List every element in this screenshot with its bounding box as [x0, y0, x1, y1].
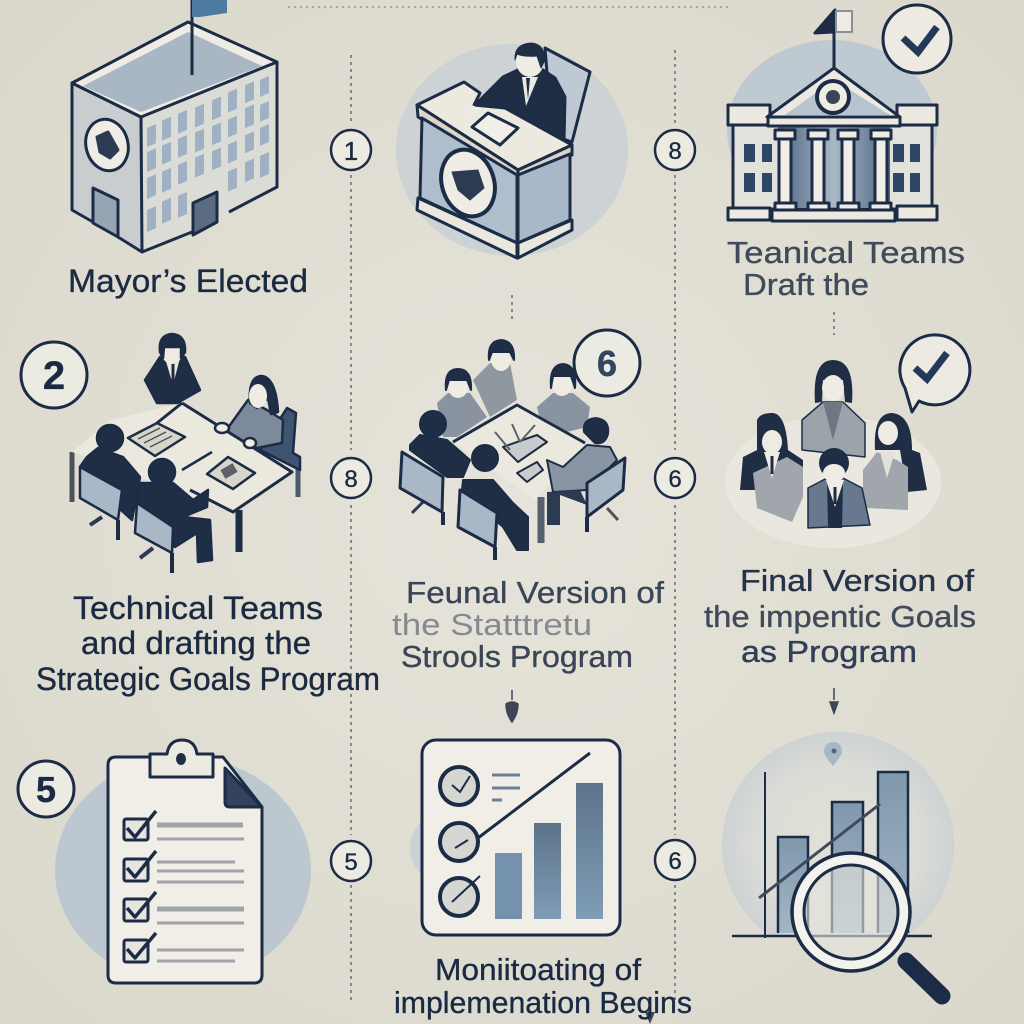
checklist lines: [157, 825, 244, 961]
chart bars: [495, 783, 603, 919]
panel: checklist: [18, 740, 311, 983]
arrow: connector at page bottom: [645, 1012, 655, 1024]
step marker 8 top: [655, 130, 695, 170]
label: [392, 575, 664, 674]
label: Strategic Goals Program: [36, 661, 380, 697]
panel: monitoring chart: [394, 740, 692, 1020]
icon: magnifying glass: [792, 853, 942, 996]
panel: government palace with check: [727, 5, 965, 302]
label: as Program: [741, 634, 917, 669]
backdrop ellipse: [410, 790, 620, 906]
panel: mayor at podium: [396, 43, 628, 258]
label: implemenation Begins: [394, 985, 692, 1020]
step marker 8 middle: 8: [344, 466, 358, 493]
backdrop ellipse: [725, 416, 941, 548]
step badge 5: 5: [36, 769, 56, 810]
panel: approving group: [704, 335, 976, 669]
label: the impentic Goals: [704, 599, 976, 634]
step badge 5: [18, 761, 74, 817]
backdrop circle: [55, 757, 311, 983]
backdrop circle: [727, 40, 937, 220]
label: [394, 952, 692, 1020]
icon: meeting table: [72, 334, 300, 573]
label: [704, 563, 976, 669]
label: Mayor’s Elected: [68, 263, 308, 299]
arrow: connector below step 6: [830, 688, 838, 713]
label: Technical Teams: [73, 590, 323, 626]
step badge 2: 2: [43, 354, 65, 398]
step marker 6 middle: [655, 458, 695, 498]
label: Draft the: [743, 267, 869, 302]
step marker 1: 1: [344, 136, 358, 166]
label: Feunal Version of: [406, 575, 664, 610]
label: Teanical Teams: [727, 235, 965, 270]
label: and drafting the: [81, 625, 311, 661]
step marker 6 bottom: [655, 840, 695, 880]
step marker 8 middle: [331, 458, 371, 498]
icon: city hall building: [72, 0, 277, 252]
chart bars: [778, 772, 908, 933]
icon: meeting table group: [400, 340, 625, 560]
panel: technical teams meeting: [21, 334, 380, 697]
icon: people group: [740, 360, 927, 528]
step marker 6 middle: 6: [668, 466, 682, 493]
backdrop circle: [722, 732, 954, 935]
label: [36, 590, 380, 697]
panel: group table meeting: [392, 330, 664, 674]
label: Moniitoating of: [435, 952, 641, 987]
label: Strools Program: [401, 639, 633, 674]
arrow: connector below step 4: [506, 690, 518, 722]
label: Final Version of: [740, 563, 974, 598]
step marker 8 top: 8: [668, 138, 682, 165]
label: the Statttretu: [392, 607, 592, 642]
step marker 6 bottom: 6: [668, 848, 682, 875]
icon: clipboard checklist: [108, 740, 262, 983]
step badge: 6: [597, 343, 617, 384]
icon: location pin: [824, 742, 842, 766]
panel: evaluation chart with magnifier: [722, 732, 954, 996]
step marker 5: [331, 841, 371, 881]
step badge 2: [21, 342, 87, 408]
step badge: [574, 330, 640, 396]
icon: check badge: [883, 5, 951, 73]
backdrop circle: [396, 44, 628, 256]
icon: dashboard frame: [422, 740, 620, 935]
icon: podium with speaker: [417, 43, 590, 258]
icon: classical building: [728, 10, 937, 221]
panel: mayor's office building: [68, 0, 308, 299]
building windows: [147, 75, 269, 232]
step marker 1: [331, 130, 371, 170]
step marker 5: 5: [344, 849, 358, 876]
icon: check speech bubble: [900, 335, 970, 412]
